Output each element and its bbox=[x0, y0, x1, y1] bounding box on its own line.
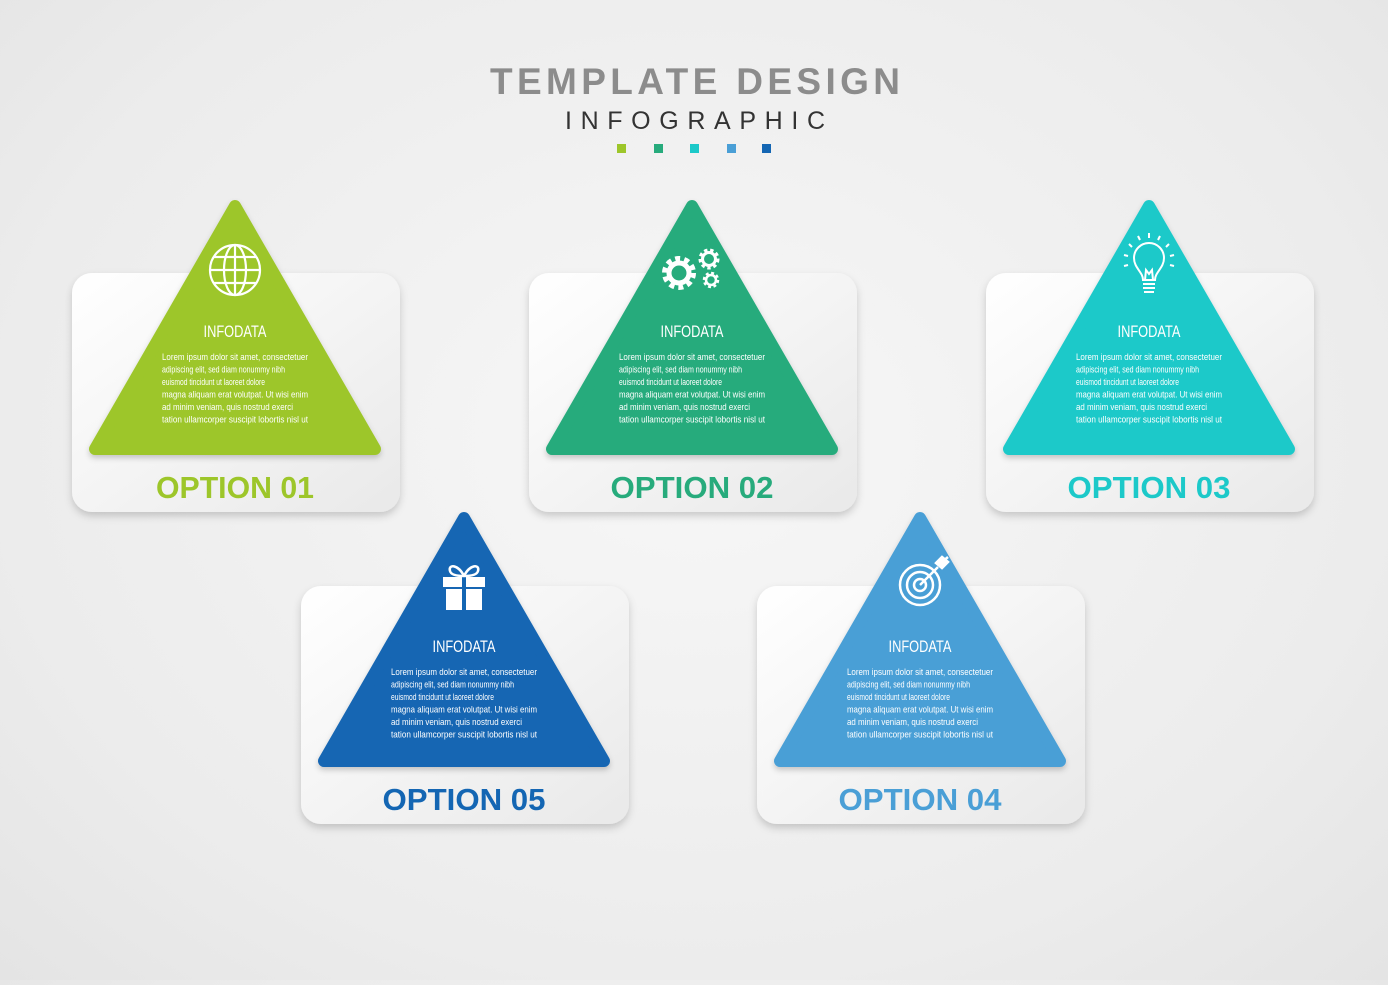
panel: option 01: INFODATA bbox=[204, 322, 267, 341]
icon: globe bbox=[210, 245, 260, 295]
title bbox=[490, 61, 900, 135]
panel: option 02: INFODATA bbox=[660, 322, 724, 341]
icon: lightbulb bbox=[1124, 233, 1174, 292]
panel: option 03 bbox=[986, 206, 1314, 512]
icon: gears bbox=[666, 251, 717, 286]
subtitle: INFOGRAPHIC bbox=[565, 107, 825, 135]
panel: option 04: INFODATA bbox=[888, 637, 952, 656]
panel: option 03: INFODATA bbox=[1118, 322, 1181, 341]
panel: option 05 bbox=[301, 518, 629, 824]
icon: target bbox=[900, 557, 948, 605]
icon: gift bbox=[443, 566, 485, 610]
panel: option 04 bbox=[757, 518, 1085, 824]
title: TEMPLATE DESIGN bbox=[490, 61, 900, 102]
panel: option 02 bbox=[529, 206, 857, 512]
option label: OPTION 04 bbox=[838, 782, 1002, 817]
panel: option 01 bbox=[72, 206, 400, 512]
option label: OPTION 03 bbox=[1068, 470, 1230, 505]
option label: OPTION 05 bbox=[382, 782, 546, 817]
color squares bbox=[617, 144, 771, 153]
option label: OPTION 01 bbox=[156, 470, 314, 505]
option label: OPTION 02 bbox=[610, 470, 774, 505]
panel: option 05: INFODATA bbox=[432, 637, 496, 656]
